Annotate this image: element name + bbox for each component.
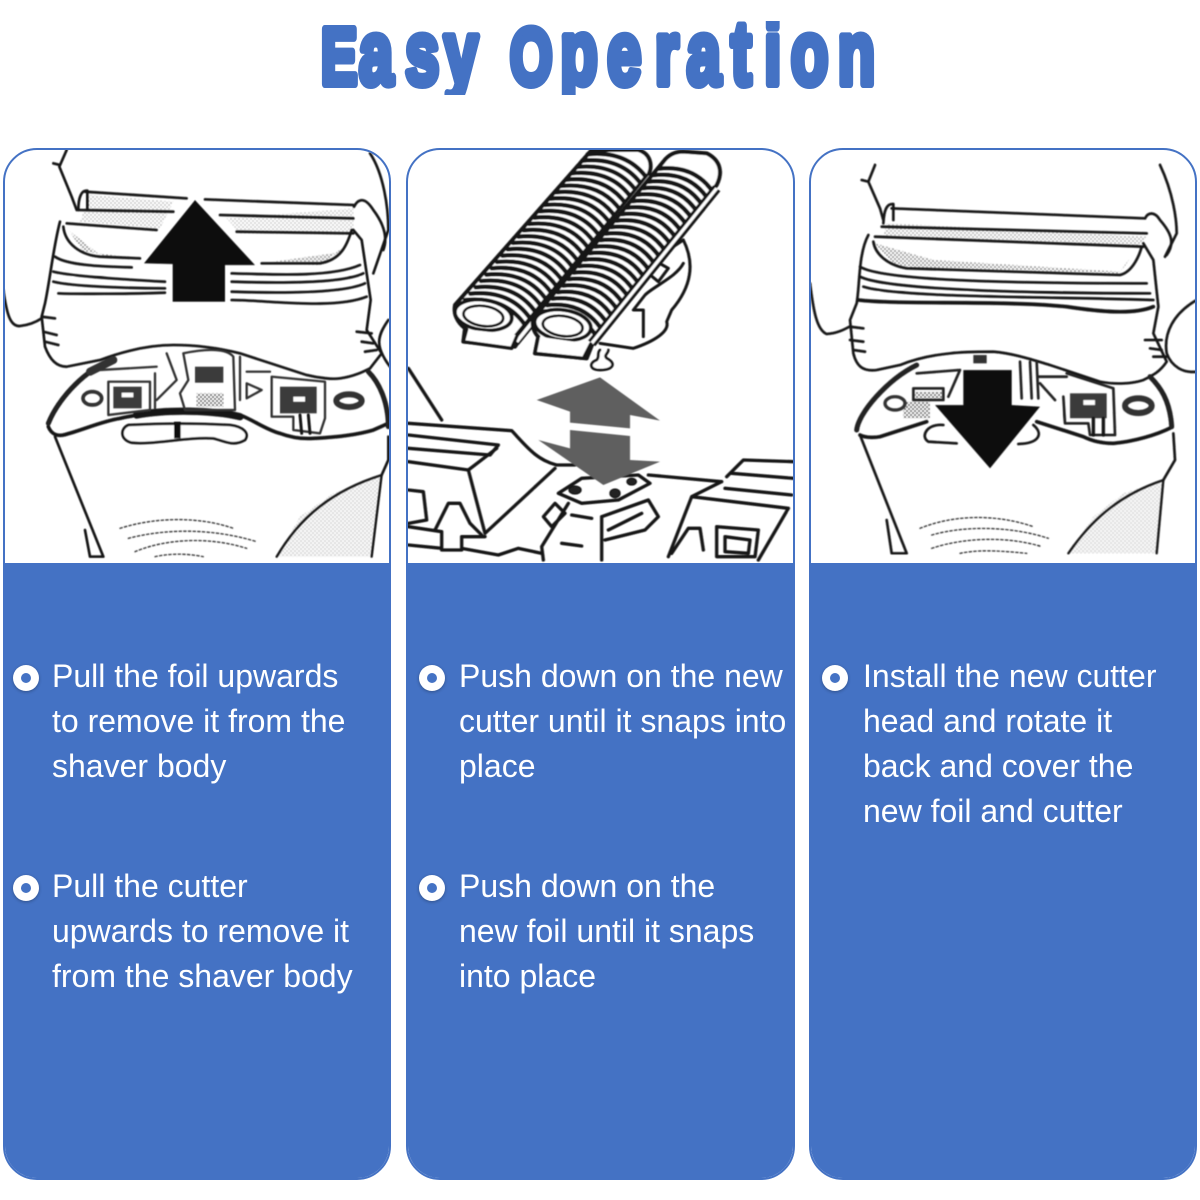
cutter roll one xyxy=(453,150,651,348)
cutter bracket xyxy=(591,240,690,370)
text: install xyxy=(863,658,1156,829)
text: pull the foil: Pull the foil upwards xyxy=(52,658,338,694)
text: pull the cutter: upwards to remove it xyxy=(52,913,349,949)
text: push the cutter: cutter until it snaps into xyxy=(459,703,786,739)
text: install: head and rotate it xyxy=(863,703,1112,739)
text: install: back and cover the xyxy=(863,748,1133,784)
title xyxy=(322,21,874,95)
title: peration xyxy=(560,3,875,104)
text: pull the cutter: Pull the cutter xyxy=(52,868,248,904)
text: pull the foil xyxy=(52,658,345,784)
title: asy xyxy=(359,3,478,104)
text: push the foil: new foil until it snaps xyxy=(459,913,754,949)
text: push the cutter: Push down on the new xyxy=(459,658,783,694)
cutter roll two xyxy=(533,152,720,358)
illustration: shaver with foil pulled upward xyxy=(5,150,389,1168)
text: install: new foil and cutter xyxy=(863,793,1123,829)
text: push the cutter: place xyxy=(459,748,536,784)
illustration: shaver with foil pushed downward xyxy=(786,162,1195,1178)
blue text area xyxy=(408,563,793,1178)
title: E xyxy=(321,13,357,102)
panel: step 2 install cutter and foil xyxy=(406,148,795,1180)
text: pull the foil: to remove it from the xyxy=(52,703,345,739)
bullet: pull the cutter xyxy=(13,875,39,901)
panel: step 1 remove foil and cutter xyxy=(3,148,391,1180)
bullet: push the foil xyxy=(419,875,445,901)
text: push the foil xyxy=(459,868,754,994)
illustration: cutter heads above shaver with arrows xyxy=(408,150,793,562)
text: push the foil: Push down on the xyxy=(459,868,715,904)
text: push the cutter xyxy=(459,658,786,784)
blue text area xyxy=(5,563,389,1178)
gray arrows xyxy=(537,377,660,428)
text: pull the cutter: from the shaver body xyxy=(52,958,353,994)
text: pull the cutter xyxy=(52,868,353,994)
title: O xyxy=(510,13,552,102)
bullet: install xyxy=(822,665,848,691)
panel: step 3 replace cutter head xyxy=(809,148,1197,1180)
bullet: push the cutter xyxy=(419,665,445,691)
text: pull the foil: shaver body xyxy=(52,748,226,784)
lower shaver body xyxy=(408,368,575,555)
bullet: pull the foil xyxy=(13,665,39,691)
blue text area xyxy=(811,563,1195,1178)
text: push the foil: into place xyxy=(459,958,596,994)
text: install: Install the new cutter xyxy=(863,658,1156,694)
